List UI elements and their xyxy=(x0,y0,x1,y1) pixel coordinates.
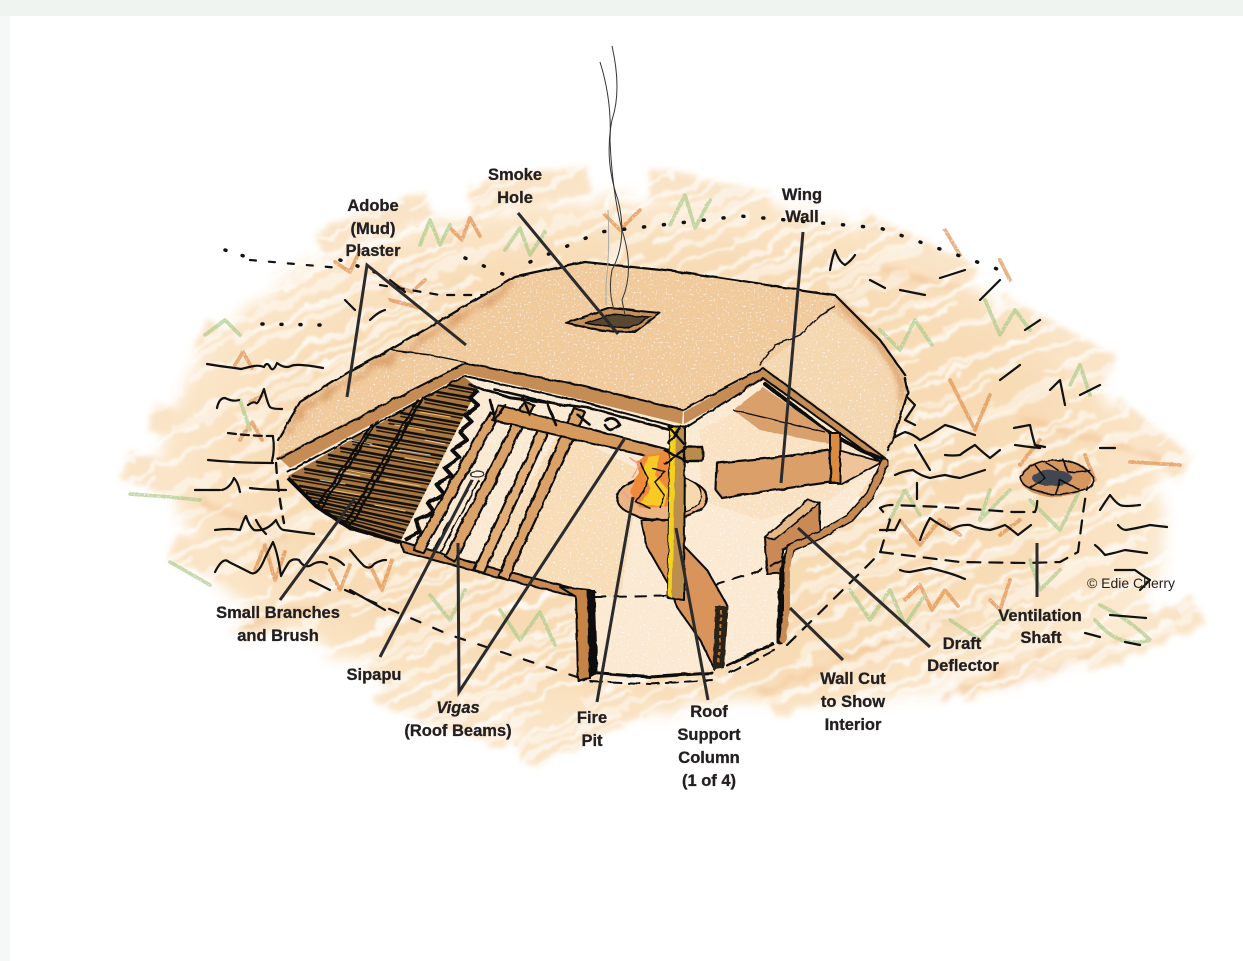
label: roof support column: (1 of 4) xyxy=(682,772,736,790)
label: adobe plaster: (Mud) xyxy=(351,220,395,238)
label: vigas: Vigas xyxy=(436,699,480,717)
black ground scribbles and dots xyxy=(195,216,1167,678)
small branches and brush xyxy=(288,376,478,542)
smoke hole xyxy=(566,308,660,332)
grass and orange pencil marks xyxy=(130,195,1180,645)
vigas: roof beams xyxy=(413,402,585,580)
wing wall xyxy=(716,387,882,498)
label: sipapu: Sipapu xyxy=(346,666,402,684)
label: ventilation shaft: Ventilation xyxy=(998,607,1082,625)
front roof edge and cross beam xyxy=(278,363,885,472)
label: wall cut: Interior xyxy=(825,716,882,734)
roof: adobe mud plaster xyxy=(278,262,908,458)
label: wall cut: Wall Cut xyxy=(820,670,886,688)
label: roof support column: Column xyxy=(678,749,740,767)
label: smoke hole: Smoke xyxy=(488,166,542,184)
label: small branches: Small Branches xyxy=(216,604,340,622)
pit interior floor xyxy=(288,372,885,680)
label: wing wall: Wing xyxy=(782,186,822,204)
label: small branches: and Brush xyxy=(237,627,319,645)
pit rim lines xyxy=(590,560,782,684)
label: fire pit: Pit xyxy=(581,732,603,750)
cut wall section centre xyxy=(641,520,728,670)
fire pit xyxy=(617,452,707,520)
label: ventilation shaft: Shaft xyxy=(1020,629,1062,647)
smoke wisps xyxy=(600,46,628,315)
label: roof support column: Support xyxy=(677,726,741,744)
label: adobe plaster: Plaster xyxy=(345,242,401,260)
label: wing wall: Wall xyxy=(785,208,819,226)
label: wall cut: to Show xyxy=(821,693,885,711)
label: draft deflector: Deflector xyxy=(927,657,999,675)
label: adobe plaster: Adobe xyxy=(347,197,399,215)
ground wash xyxy=(125,180,1200,755)
credit: © Edie Cherry xyxy=(1087,575,1175,591)
pencil stripe texture xyxy=(100,150,1220,790)
cut wall section left xyxy=(560,587,598,680)
draft deflector xyxy=(765,500,820,574)
ventilation shaft opening xyxy=(1020,458,1094,497)
label: smoke hole: Hole xyxy=(497,189,533,207)
lower wall strip xyxy=(400,541,595,600)
leader lines xyxy=(280,213,1037,702)
label: roof support column: Roof xyxy=(690,703,728,721)
label: fire pit: Fire xyxy=(577,709,607,727)
sipapu xyxy=(432,471,484,553)
roof support column xyxy=(664,426,703,600)
label: draft deflector: Draft xyxy=(943,635,981,653)
wall cut stones xyxy=(780,463,885,640)
label: vigas: (Roof Beams) xyxy=(404,722,512,740)
